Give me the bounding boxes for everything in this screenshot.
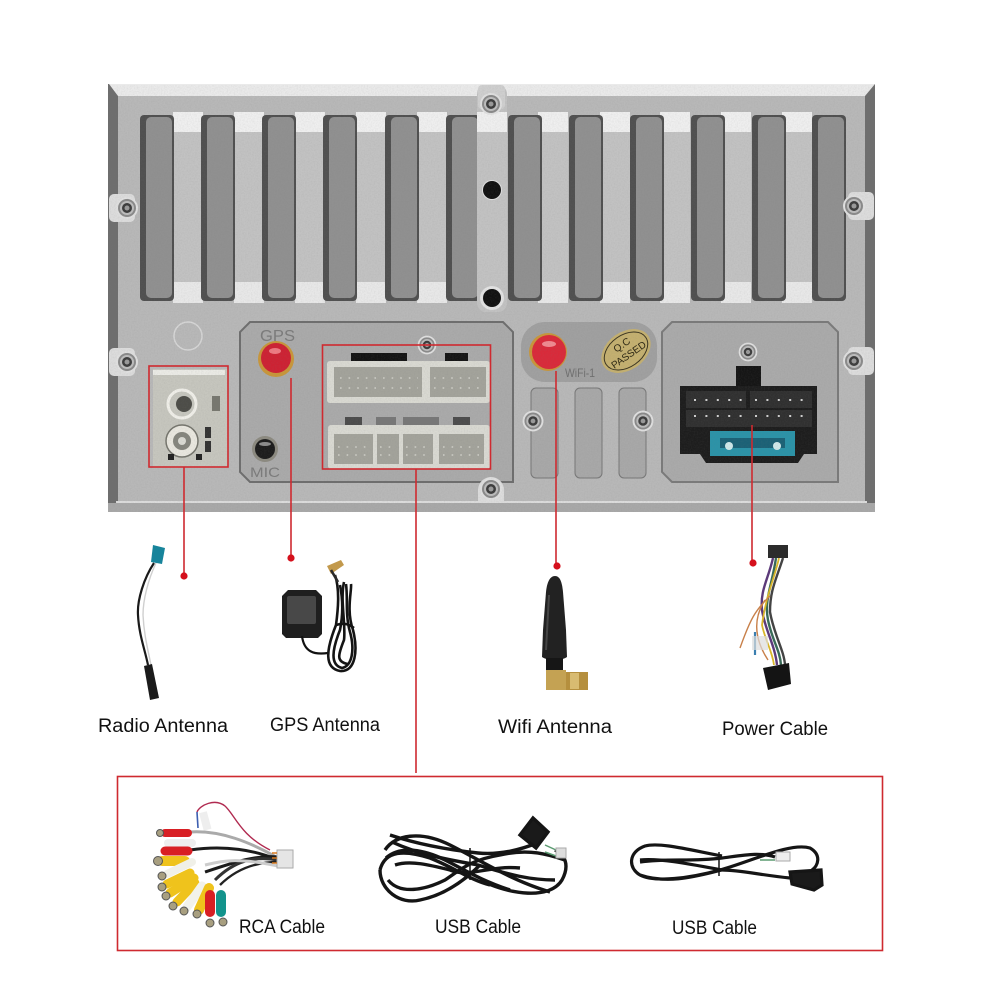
wifi line [555,371,557,566]
QC passed sticker [593,320,659,382]
QC passed sticker: PASSED [610,340,649,371]
power cable image [740,545,791,690]
mounting screws with lugs [109,85,874,503]
round blank mark [174,322,202,350]
label: GPS antenna: GPS Antenna [270,715,380,736]
RCA cable image [154,802,293,927]
QC passed sticker: Q.C [612,336,633,355]
wifi recess [521,322,657,478]
GPS and connector recess [240,322,513,482]
gps line [290,378,292,558]
microphone jack [252,436,278,462]
panel: rear of head unit [108,84,875,512]
cables group box [118,776,882,950]
USB cable image 1 [380,818,566,901]
label: USB cable first: USB Cable [435,917,521,938]
GPS SMA socket [258,341,294,377]
GPS and connector recess: MIC [250,464,280,480]
wifi recess: WiFi-1 [565,366,595,380]
GPS and connector recess: GPS [260,328,295,345]
power line [751,425,753,563]
connector line [415,469,417,773]
power connector [680,366,817,463]
label: wifi antenna: Wifi Antenna [498,717,612,738]
wifi antenna image [542,576,588,690]
red callout lines and markers [118,345,882,950]
label: RCA cable: RCA Cable [239,917,325,938]
power recess [662,322,838,482]
metal texture [109,85,875,512]
GPS antenna image [282,560,355,671]
label: power cable: Power Cable [722,719,828,740]
radio antenna image [138,545,165,700]
label: USB cable second: USB Cable [672,918,757,939]
radio antenna socket [153,369,228,468]
label: radio antenna: Radio Antenna [98,716,228,737]
radio callout box [149,366,228,467]
centre strip with mounting holes [477,85,507,312]
multi-pin connector block [327,353,490,469]
connector callout box [322,345,490,469]
panel body [108,84,875,512]
marker dots [180,554,757,580]
radio line [183,467,185,576]
ventilation slots and fins [140,112,846,303]
wifi SMA socket [529,333,567,371]
USB cable image 2 [632,845,822,890]
